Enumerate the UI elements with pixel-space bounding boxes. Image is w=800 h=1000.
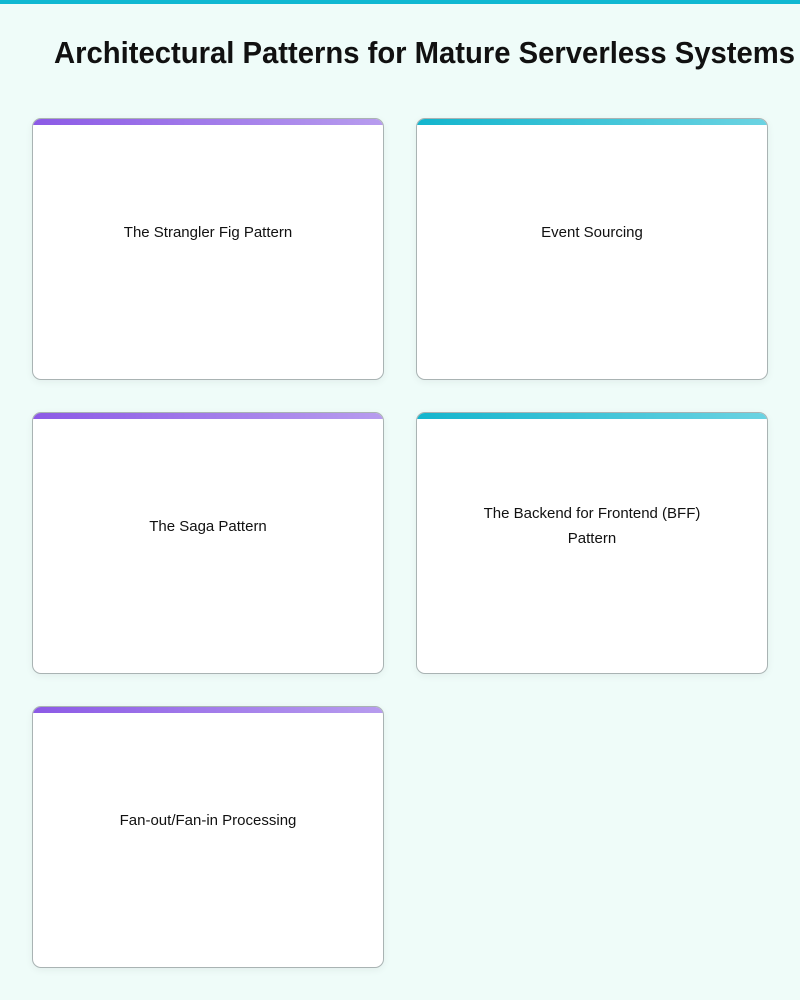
panel: strangler fig: The Strangler Fig Pattern [124,224,292,240]
panel: BFF: The Backend for Frontend (BFF) [484,505,700,522]
panel: strangler fig [32,118,384,380]
panel: event sourcing [416,118,768,380]
panel: BFF: Pattern [568,530,616,547]
panel: saga [32,412,384,674]
panel: saga: The Saga Pattern [149,518,267,534]
panel: BFF [416,412,768,674]
panel: event sourcing: Event Sourcing [541,224,643,240]
panel: fan-out [32,706,384,968]
panel: fan-out: Fan-out/Fan-in Processing [120,812,296,828]
